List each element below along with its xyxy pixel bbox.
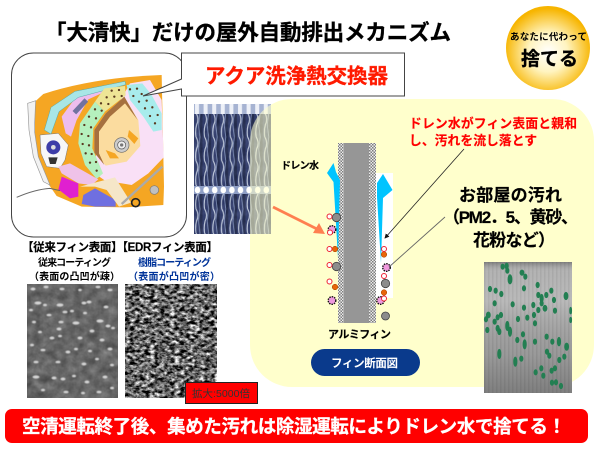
drain water left bbox=[327, 163, 340, 258]
filter assembly bbox=[74, 100, 86, 113]
label: drain water: ドレン水 bbox=[281, 159, 319, 172]
fan hub bbox=[106, 130, 138, 158]
fin surface labels: （表面の凸凹が疎） bbox=[29, 270, 120, 283]
leader line: room dirt bbox=[389, 217, 445, 267]
red note: drain water explanation: ドレン水がフィン表面と親和 bbox=[409, 116, 577, 131]
fan housing bbox=[94, 97, 140, 166]
fin surface labels: 従来コーティング bbox=[38, 256, 111, 269]
cyan air duct bbox=[44, 81, 126, 134]
conclusion banner: 空清運転終了後、集めた汚れは除湿運転によりドレン水で捨てる！ bbox=[22, 416, 566, 437]
aluminium core bbox=[344, 143, 369, 323]
pill label: fin cross-section diagram: フィン断面図 bbox=[331, 356, 398, 370]
text: room dirt: （PM2．5、黄砂、 bbox=[443, 208, 578, 227]
coil tube dots bbox=[80, 87, 159, 172]
fin coating bbox=[338, 143, 376, 323]
photo: EDR fin surface bbox=[125, 284, 217, 398]
drain water right bbox=[377, 174, 392, 263]
indoor unit body bbox=[35, 75, 164, 207]
green coil right bbox=[127, 83, 162, 132]
power wire bbox=[17, 188, 60, 197]
label: aluminium fin: アルミフィン bbox=[328, 328, 391, 341]
badge: discards for you: あなたに代わって bbox=[510, 32, 587, 43]
red note: drain water explanation: し、汚れを流し落とす bbox=[409, 133, 537, 148]
leader line: drain water bbox=[385, 149, 464, 238]
white gap behind right water bbox=[376, 173, 393, 298]
badge: discards for you: 捨てる bbox=[521, 48, 578, 70]
fin surface labels: 樹脂コーティング bbox=[138, 256, 211, 269]
motor bbox=[40, 133, 68, 168]
pink inner chamber bbox=[90, 80, 164, 185]
lower duct pink bbox=[58, 163, 98, 185]
magnification label: 拡大:5000倍 bbox=[192, 387, 250, 400]
fin surface labels: 【従来フィン表面】【EDRフィン表面】 bbox=[22, 240, 218, 254]
fin cross-section diagram bbox=[327, 143, 393, 323]
badge: discards for you bbox=[506, 6, 590, 90]
heat exchanger photo bbox=[194, 104, 271, 234]
callout: aqua wash heat exchanger bbox=[143, 53, 404, 96]
lavender band bbox=[62, 87, 110, 137]
dirt particles bbox=[327, 213, 390, 320]
magenta drain pan bbox=[58, 177, 78, 198]
front cover bbox=[28, 101, 50, 185]
arrow: dirt collects on fin bbox=[273, 207, 325, 234]
text: room dirt: お部屋の汚れ bbox=[459, 186, 562, 205]
panel: indoor unit cross-section bbox=[12, 53, 186, 237]
panel: yellow mechanism background bbox=[250, 99, 594, 387]
fin surface labels: （表面が凸凹が密） bbox=[128, 270, 220, 283]
photo: dirt on fin surface bbox=[484, 262, 572, 393]
blue drain part bbox=[82, 188, 116, 207]
magnification label bbox=[186, 382, 258, 404]
text: room dirt: 花粉など） bbox=[473, 231, 555, 250]
beige duct bbox=[80, 177, 131, 207]
pill label: fin cross-section diagram bbox=[311, 349, 420, 376]
title: 「大清快」だけの屋外自動排出メカニズム bbox=[45, 20, 451, 45]
fin surface labels bbox=[22, 240, 220, 283]
diagonal grey rod bbox=[122, 167, 162, 204]
conclusion banner bbox=[5, 409, 588, 443]
red note: drain water explanation bbox=[409, 116, 577, 148]
green coil left bbox=[78, 102, 105, 179]
text: room dirt bbox=[443, 186, 578, 250]
callout: aqua wash heat exchanger: アクア洗浄熱交換器 bbox=[205, 65, 388, 88]
photo: conventional fin surface bbox=[27, 284, 118, 398]
